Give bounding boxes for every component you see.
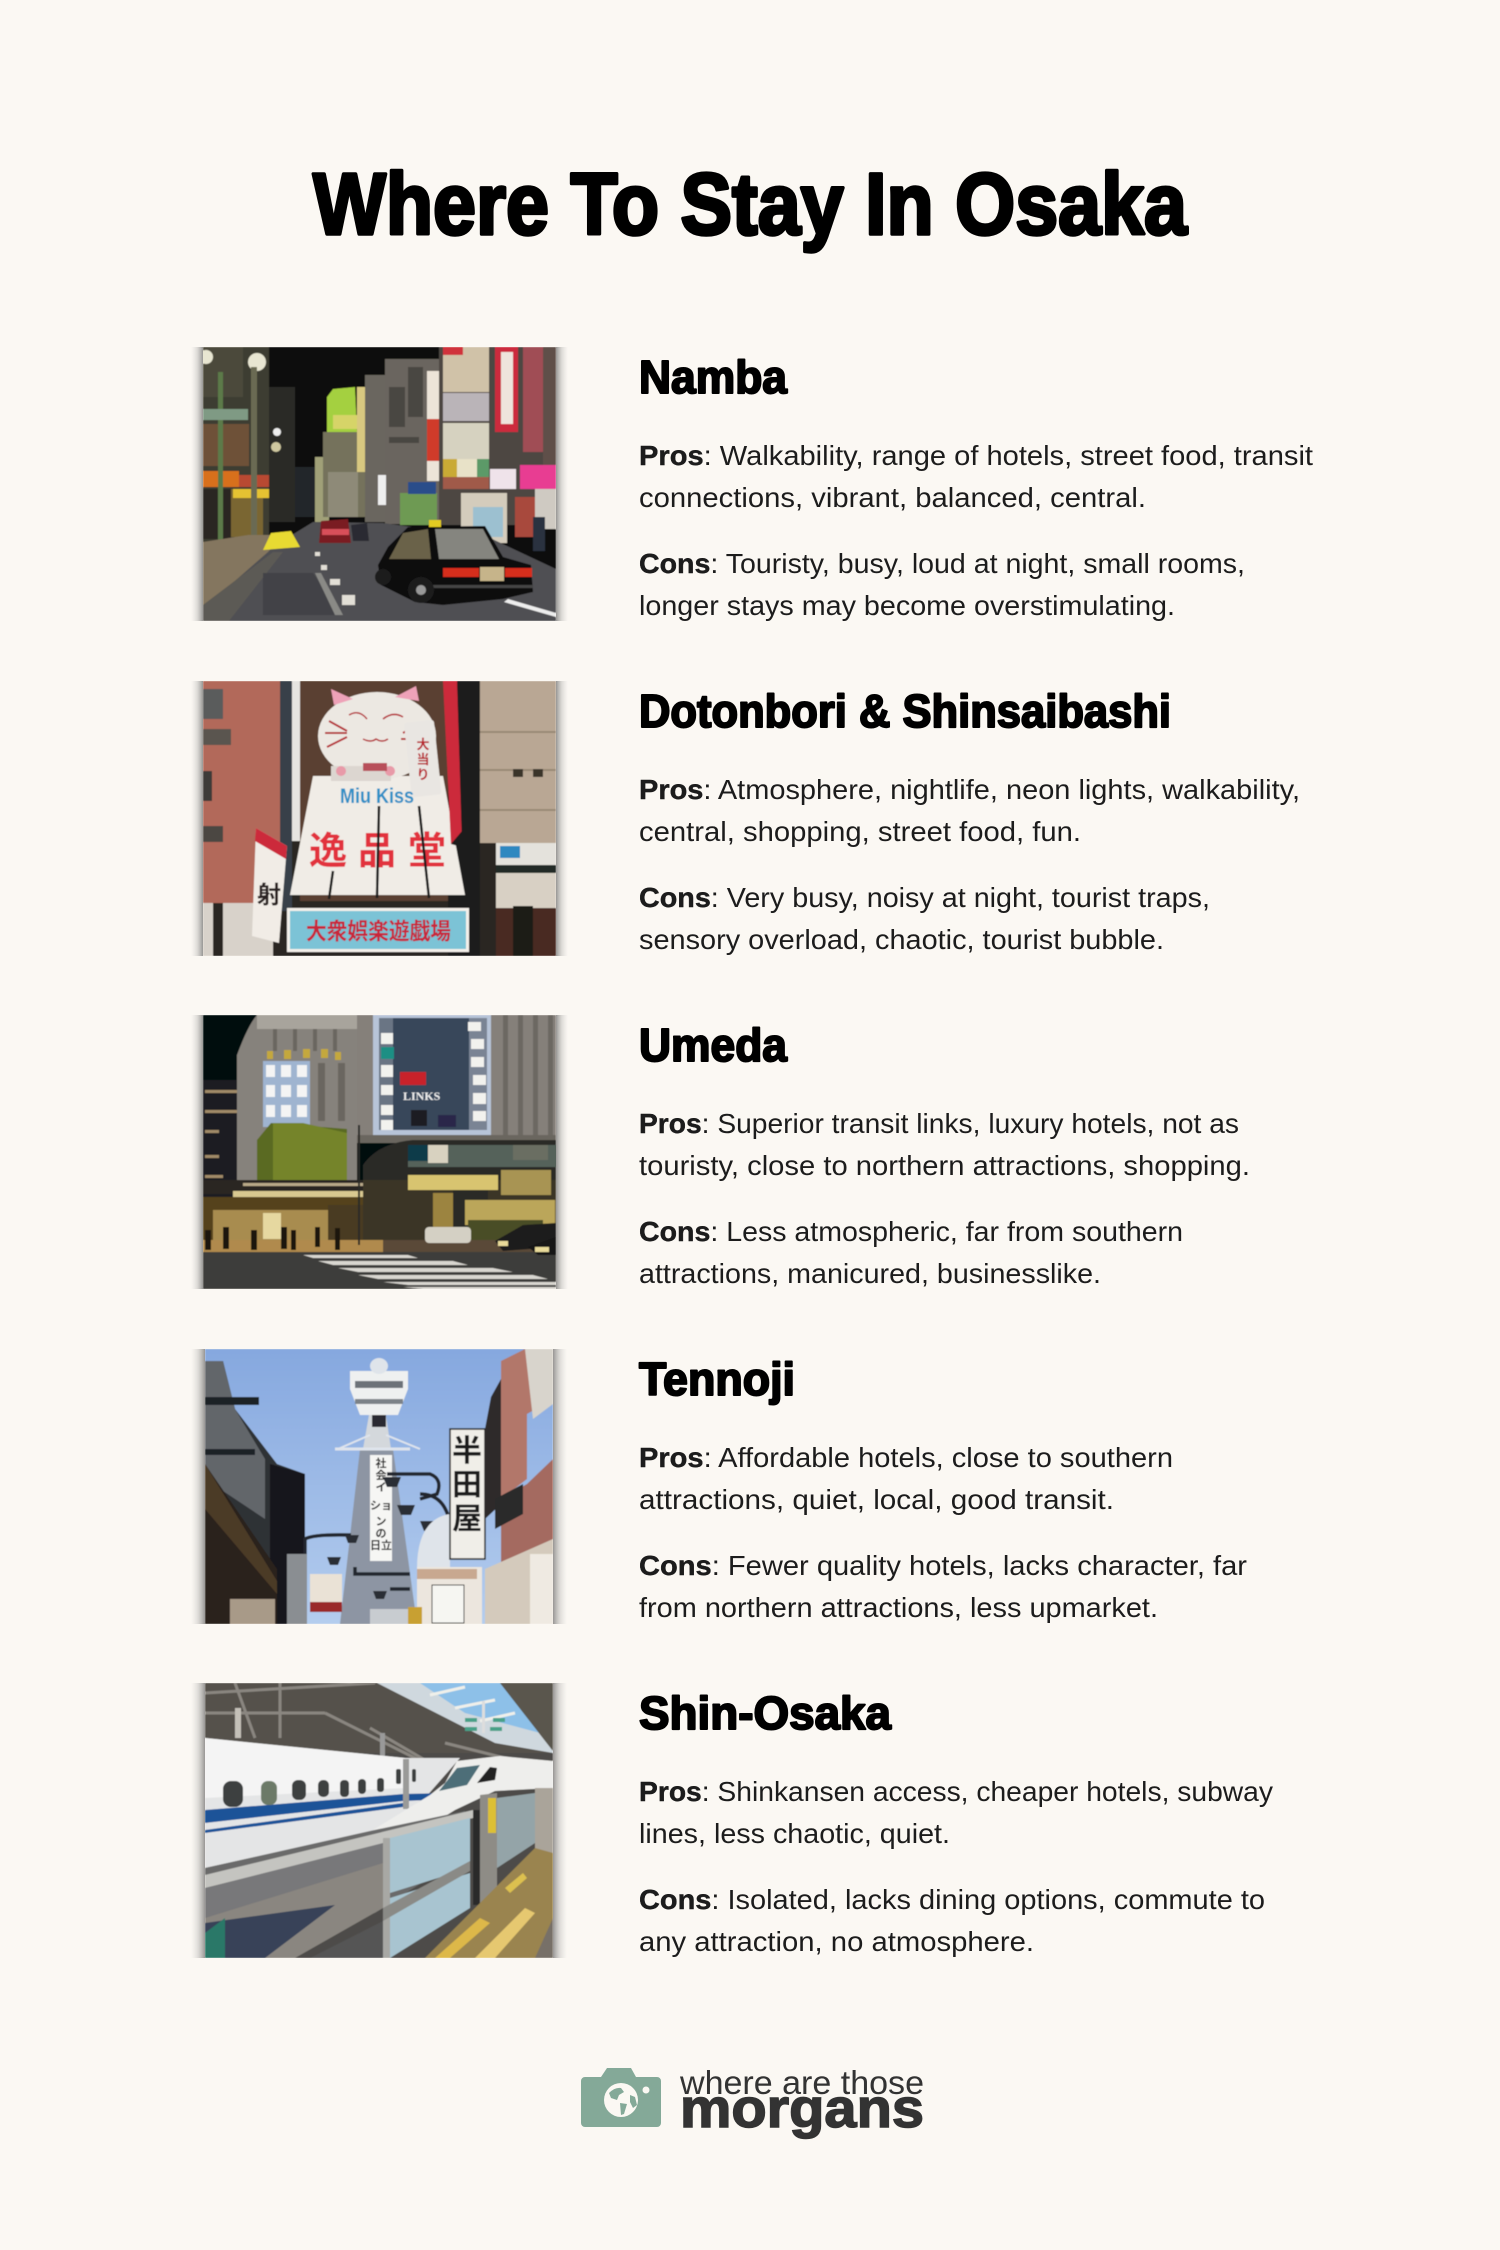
panel: Umeda [191, 1015, 1250, 1289]
pros: Dotonbori: central, shopping, street food, fun. [639, 816, 1081, 847]
cons: Dotonbori [639, 882, 1210, 955]
cons: Umeda: Cons: Less atmospheric, far from southern [639, 1216, 1183, 1247]
photo: maneki-neko billboard: 当 [416, 752, 430, 767]
title: Where To Stay In Osaka [313, 156, 1188, 253]
cons: Umeda: attractions, manicured, businesslike. [639, 1258, 1101, 1289]
photo: maneki-neko billboard: り [416, 767, 430, 782]
pros: Tennoji [639, 1442, 1173, 1515]
photo: Tsutenkaku tower: 日立 [370, 1538, 392, 1552]
panel: Shin-Osaka [191, 1683, 1273, 1958]
wordmark line 2: morgans [680, 2077, 924, 2139]
panel: Dotonbori & Shinsaibashi [191, 681, 1300, 956]
heading: Umeda: Umeda [639, 1019, 787, 1071]
heading: Namba: Namba [639, 351, 787, 403]
pros: Umeda [639, 1108, 1250, 1181]
photo: Umeda buildings at dusk: LINKS [403, 1089, 441, 1103]
photo shadow: Shin-Osaka [191, 1683, 567, 1958]
cons: Namba [639, 548, 1245, 621]
photo: Umeda buildings at dusk [203, 1015, 556, 1289]
pros: Shin-Osaka: lines, less chaotic, quiet. [639, 1818, 950, 1849]
photo: Tsutenkaku tower: 社 [376, 1456, 386, 1470]
photo: Tsutenkaku tower: の [376, 1528, 386, 1540]
photo shadow: Namba [191, 347, 568, 621]
photo: maneki-neko billboard: 大 [416, 737, 430, 752]
logo: where are those morgans [581, 2064, 924, 2139]
photo: maneki-neko billboard: 大衆娯楽遊戯場 [306, 918, 451, 944]
icon: camera with globe [581, 2068, 661, 2127]
cons: Namba: Cons: Touristy, busy, loud at night, small rooms, [639, 548, 1245, 579]
photo: Tsutenkaku tower: 半 [452, 1435, 482, 1468]
photo: Tsutenkaku tower: イ [376, 1481, 386, 1494]
pros: Umeda: touristy, close to northern attractions, shopping. [639, 1150, 1250, 1181]
pros: Namba: Pros: Walkability, range of hotels, street food, transit [639, 440, 1313, 471]
cons: Namba: longer stays may become overstimulating. [639, 590, 1175, 621]
heading: Tennoji: Tennoji [639, 1353, 795, 1405]
photo shadow: Tennoji [191, 1349, 567, 1624]
cons: Shin-Osaka: any attraction, no atmosphere. [639, 1926, 1034, 1957]
cons: Dotonbori: sensory overload, chaotic, tourist bubble. [639, 924, 1164, 955]
cons: Tennoji: Cons: Fewer quality hotels, lacks character, far [639, 1550, 1247, 1581]
photo: Tsutenkaku tower: 田 [452, 1469, 482, 1502]
photo: Tsutenkaku tower: 屋 [452, 1503, 482, 1536]
pros: Dotonbori: Pros: Atmosphere, nightlife, neon lights, walkability, [639, 774, 1300, 805]
photo: Tsutenkaku tower: ン [376, 1516, 386, 1528]
panel: Tennoji [191, 1349, 1247, 1624]
pros: Dotonbori [639, 774, 1300, 847]
pros: Namba [639, 440, 1313, 513]
cons: Dotonbori: Cons: Very busy, noisy at night, tourist traps, [639, 882, 1210, 913]
photo: maneki-neko billboard: 射 [257, 882, 281, 909]
photo: maneki-neko billboard [203, 681, 556, 956]
photo: Tsutenkaku tower: 会 [376, 1468, 386, 1482]
photo: Tsutenkaku tower [205, 1349, 553, 1624]
pros: Tennoji: Pros: Affordable hotels, close to southern [639, 1442, 1173, 1473]
photo: Shinkansen at platform [205, 1683, 553, 1958]
cons: Tennoji [639, 1550, 1247, 1623]
pros: Tennoji: attractions, quiet, local, good transit. [639, 1484, 1114, 1515]
cons: Umeda [639, 1216, 1183, 1289]
pros: Shin-Osaka: Pros: Shinkansen access, cheaper hotels, subway [639, 1776, 1273, 1807]
cons: Shin-Osaka [639, 1884, 1265, 1957]
panel: Namba [191, 347, 1313, 621]
photo: maneki-neko billboard: 逸 [309, 831, 347, 873]
photo shadow: Umeda [191, 1015, 568, 1289]
photo: Tsutenkaku tower: ショ [370, 1500, 392, 1512]
photo: maneki-neko billboard: Miu Kiss [340, 785, 414, 808]
cons: Tennoji: from northern attractions, less upmarket. [639, 1592, 1158, 1623]
photo: maneki-neko billboard: 品 [358, 831, 396, 873]
heading: Dotonbori & Shinsaibashi: Dotonbori & Shinsaibashi [639, 685, 1171, 737]
pros: Shin-Osaka [639, 1776, 1273, 1849]
pros: Namba: connections, vibrant, balanced, central. [639, 482, 1146, 513]
photo shadow: Dotonbori [191, 681, 568, 956]
cons: Shin-Osaka: Cons: Isolated, lacks dining options, commute to [639, 1884, 1265, 1915]
heading: Shin-Osaka: Shin-Osaka [639, 1687, 891, 1739]
pros: Umeda: Pros: Superior transit links, luxury hotels, not as [639, 1108, 1239, 1139]
wordmark line 1: where are those [679, 2064, 924, 2101]
photo: maneki-neko billboard: 堂 [408, 831, 446, 873]
photo: Namba street at night [203, 347, 556, 621]
